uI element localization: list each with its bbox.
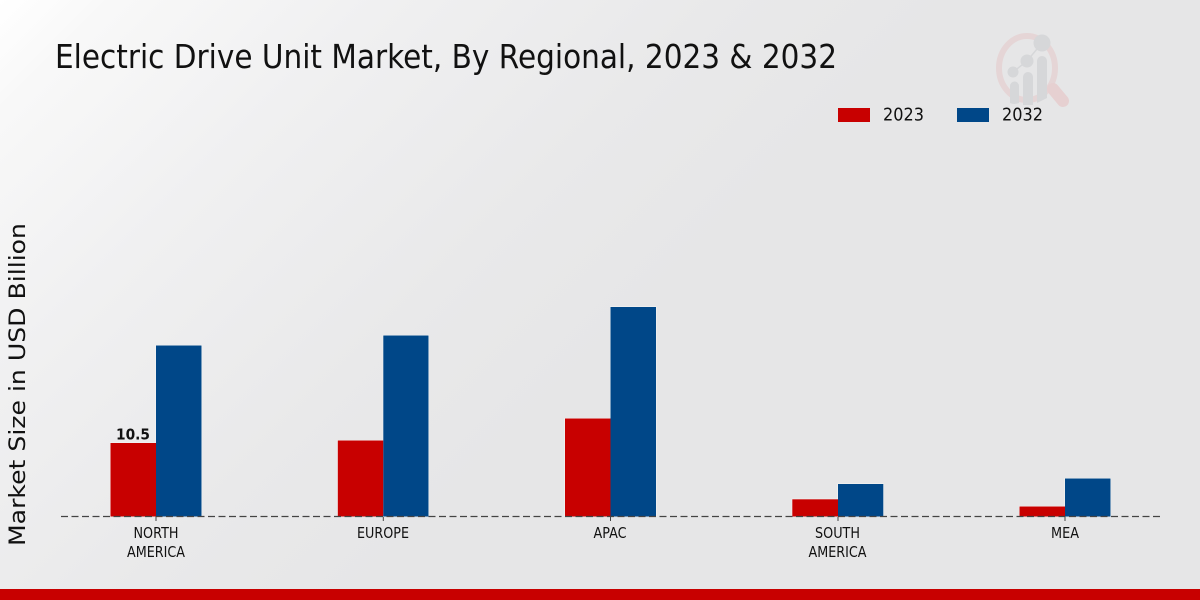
legend label: 2023: 2023 (883, 104, 924, 126)
x-axis label: Europe: EUROPE (357, 524, 409, 542)
bars: APAC (564, 306, 656, 516)
tick marks (156, 517, 1065, 521)
bars: North America (110, 345, 202, 516)
x-axis label: South America: SOUTH (815, 524, 860, 542)
legend swatch: 2023 (838, 108, 870, 122)
x-axis label: South America: AMERICA (808, 543, 867, 561)
bar chart (61, 306, 1160, 561)
bars: Europe (337, 335, 429, 516)
legend (838, 104, 1043, 126)
icon: magnifier logo watermark (999, 34, 1063, 105)
baseline axis (61, 516, 1160, 518)
legend label: 2032: 2032 (1002, 104, 1043, 126)
title: Electric Drive Unit Market, By Regional, 2023 & 2032 (55, 37, 837, 76)
x-axis label: MEA: MEA (1051, 524, 1080, 542)
bars: MEA (1019, 478, 1111, 516)
legend swatch: 2032 (957, 108, 989, 122)
x-axis label: North America: NORTH (134, 524, 178, 542)
x-axis label: North America: AMERICA (127, 543, 186, 561)
y-axis title: Market Size in USD Billion (5, 223, 31, 546)
x-axis label: APAC: APAC (594, 524, 626, 542)
footer bar (0, 589, 1200, 600)
data label: 10.5: 10.5 (116, 426, 150, 444)
x-axis label: North America (127, 524, 186, 561)
bars: South America (792, 484, 884, 516)
x-axis label: South America (808, 524, 867, 561)
